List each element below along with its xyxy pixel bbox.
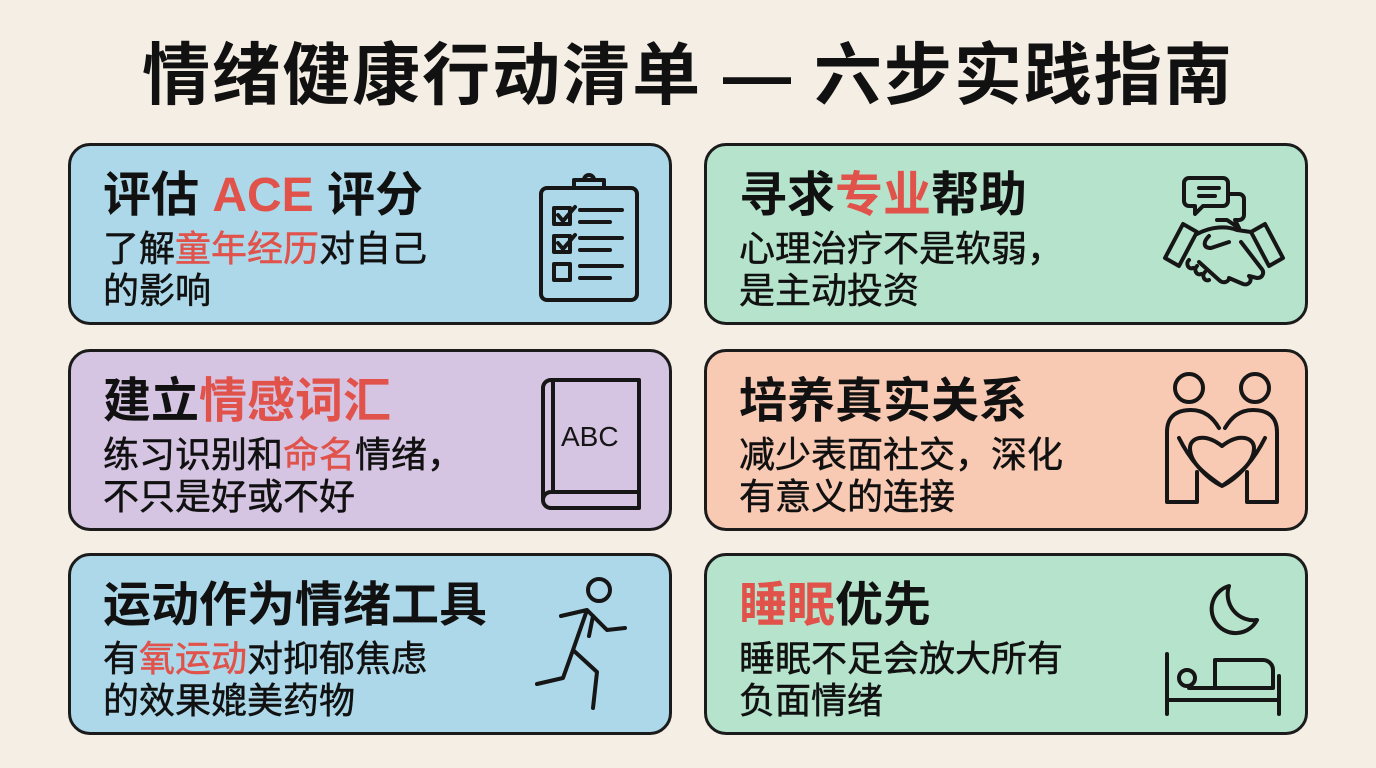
heading: 睡眠优先 <box>739 579 931 632</box>
heading: 寻求专业帮助 <box>739 169 1027 222</box>
icon: book: ABC <box>561 421 619 452</box>
text block: 不只是好或不好 <box>103 476 355 517</box>
panel: ACE score <box>68 143 672 325</box>
icon: handshake <box>1162 176 1286 286</box>
text block <box>103 228 427 311</box>
text block: 练习识别和命名情绪， <box>103 434 463 475</box>
text block: 减少表面社交，深化 <box>739 434 1063 475</box>
text block <box>103 638 427 721</box>
text block: 有氧运动对抑郁焦虑 <box>103 638 427 679</box>
text block <box>739 638 1063 721</box>
heading: 运动作为情绪工具 <box>103 579 487 632</box>
text block: 了解童年经历对自己 <box>103 228 427 269</box>
icon: clipboard <box>539 173 639 302</box>
heading: 评估 ACE 评分 <box>103 169 423 222</box>
heading: 建立情感词汇 <box>103 375 391 428</box>
icon: book <box>541 378 641 510</box>
text block: 心理治疗不是软弱， <box>739 228 1063 269</box>
icon: two people with heart <box>1165 372 1279 504</box>
panel: exercise <box>68 553 672 735</box>
text block: 是主动投资 <box>739 270 919 311</box>
text block: 的影响 <box>103 270 211 311</box>
heading: 培养真实关系 <box>739 375 1027 428</box>
text block: 有意义的连接 <box>739 476 955 517</box>
text block: 负面情绪 <box>739 680 883 721</box>
text block: 的效果媲美药物 <box>103 680 355 721</box>
panel: emotion vocabulary <box>68 349 672 531</box>
text block: 睡眠不足会放大所有 <box>739 638 1063 679</box>
icon: runner <box>534 577 627 710</box>
text block <box>103 434 463 517</box>
panel: real relationships <box>704 349 1308 531</box>
title: 情绪健康行动清单 — 六步实践指南 <box>142 38 1234 114</box>
icon: moon and bed <box>1165 584 1281 716</box>
panel: professional help <box>704 143 1308 325</box>
text block <box>739 228 1063 311</box>
text block <box>739 434 1063 517</box>
panel: sleep <box>704 553 1308 735</box>
